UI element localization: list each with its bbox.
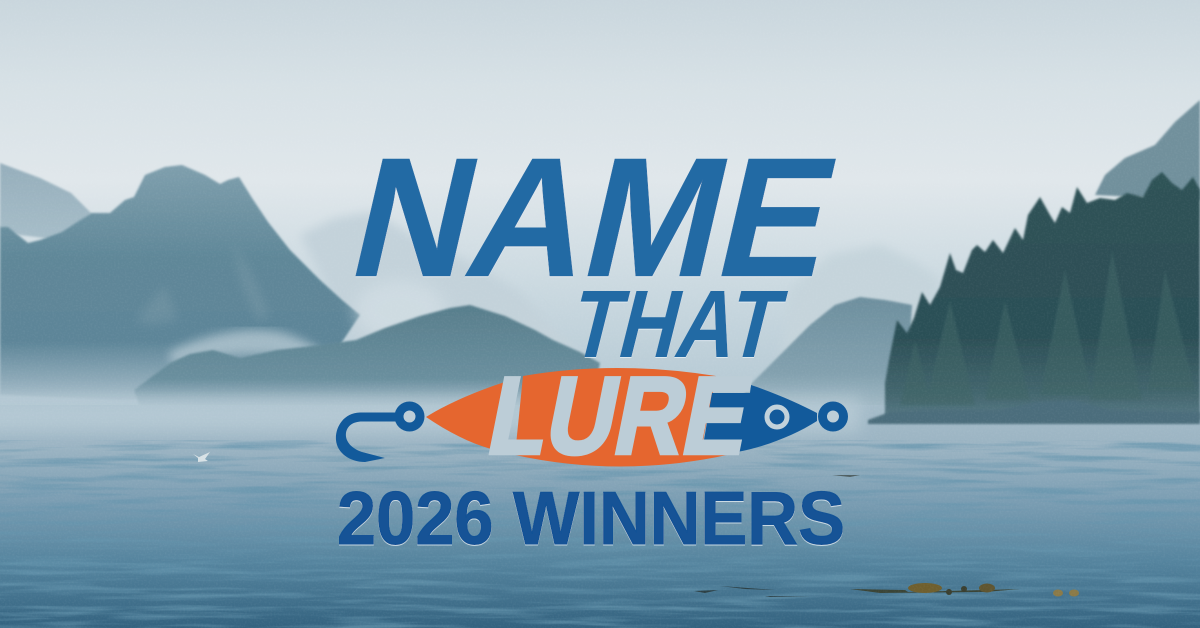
small hill right of centre xyxy=(745,297,912,420)
seagull xyxy=(193,452,210,462)
far left mountain xyxy=(0,163,91,240)
hook eye xyxy=(394,402,424,432)
tail eye hole xyxy=(827,410,839,422)
background: misty sky xyxy=(0,0,1200,430)
right forested island xyxy=(885,172,1200,420)
hook eye hole xyxy=(404,410,416,422)
fog band over left mountain xyxy=(170,330,330,365)
rocky faces on left mountain xyxy=(135,240,270,325)
title: THAT: THAT xyxy=(561,272,794,378)
mist by centre peak xyxy=(355,280,445,340)
lighter conifers xyxy=(900,250,1195,405)
title: NAME: NAME xyxy=(337,122,854,312)
small debris on water xyxy=(832,475,860,477)
orange lure body centre xyxy=(515,368,727,466)
horizon mist xyxy=(0,398,860,432)
kelp floating on water xyxy=(694,583,1079,597)
orange lure body left xyxy=(426,382,505,449)
lure centre eye xyxy=(767,407,787,427)
left mountain xyxy=(0,165,360,400)
subtitle: 2026 WINNERS: 2026 WINNERS xyxy=(337,476,845,560)
lure logo xyxy=(336,354,848,477)
blue lure tail xyxy=(704,385,817,452)
far right mountain xyxy=(1095,100,1200,200)
water xyxy=(0,405,1200,628)
hook xyxy=(336,412,400,462)
centre forested ridge xyxy=(134,305,600,407)
distant pale mountains xyxy=(300,212,940,370)
shoreline rocks xyxy=(868,400,1200,424)
tail eye xyxy=(818,402,848,432)
word: LURE: LURE xyxy=(479,354,761,477)
